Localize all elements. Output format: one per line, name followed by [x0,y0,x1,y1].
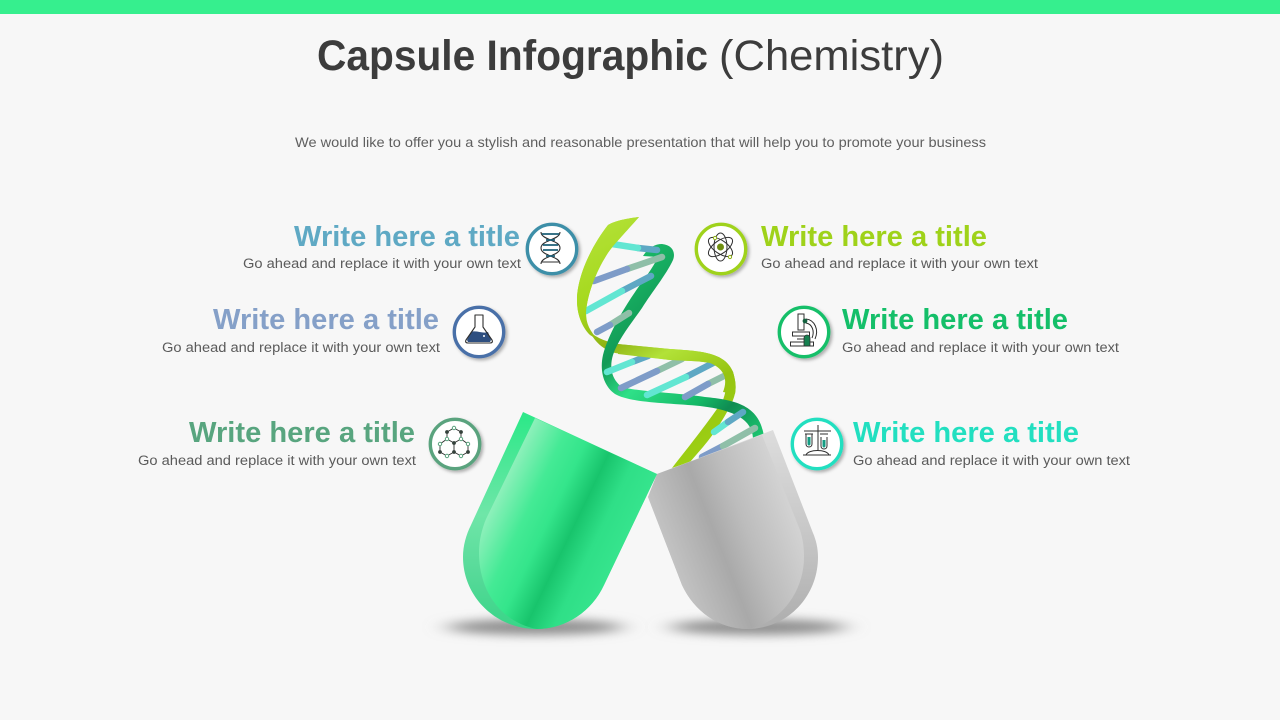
icon: test tubes [792,419,842,469]
DNA helix [577,217,764,468]
grey capsule rim [648,430,818,629]
description: Go ahead and replace it with your own text [761,256,1038,271]
heading: Write here a title [761,221,987,253]
base pair rungs [586,244,755,457]
green strand [602,244,764,438]
item: top right [696,221,1038,274]
title: (Chemistry) [719,32,944,80]
subtitle: We would like to offer you a stylish and reasonable presentation that will help you to promote your business [295,134,986,150]
title: Capsule Infographic [317,32,708,80]
lime strand middle front section [618,344,736,394]
description: Go ahead and replace it with your own text [138,453,416,468]
item: bottom right [792,417,1130,469]
description: Go ahead and replace it with your own text [842,340,1119,355]
heading: Write here a title [294,221,520,253]
top bar [0,0,1280,14]
icon: DNA [527,224,577,274]
heading: Write here a title [189,417,415,449]
green capsule half [463,412,657,629]
icon: molecule [430,419,480,469]
item: middle right [779,304,1119,357]
item: middle left [162,304,504,357]
lime strand upper front section [577,217,639,340]
green capsule front [479,418,657,629]
grey capsule front [648,435,804,629]
icon: microscope [779,307,829,357]
description: Go ahead and replace it with your own text [853,453,1130,468]
heading: Write here a title [853,417,1079,449]
grey capsule half [648,430,818,629]
heading: Write here a title [842,304,1068,336]
green capsule rim [463,412,657,629]
capsule ground shadows [447,619,846,635]
description: Go ahead and replace it with your own text [162,340,440,355]
item: bottom left [138,417,480,469]
icon: flask [454,307,504,357]
description: Go ahead and replace it with your own text [243,256,521,271]
item: top left [243,221,577,274]
heading: Write here a title [213,304,439,336]
icon: atom [696,224,746,274]
lime strand [577,217,736,468]
